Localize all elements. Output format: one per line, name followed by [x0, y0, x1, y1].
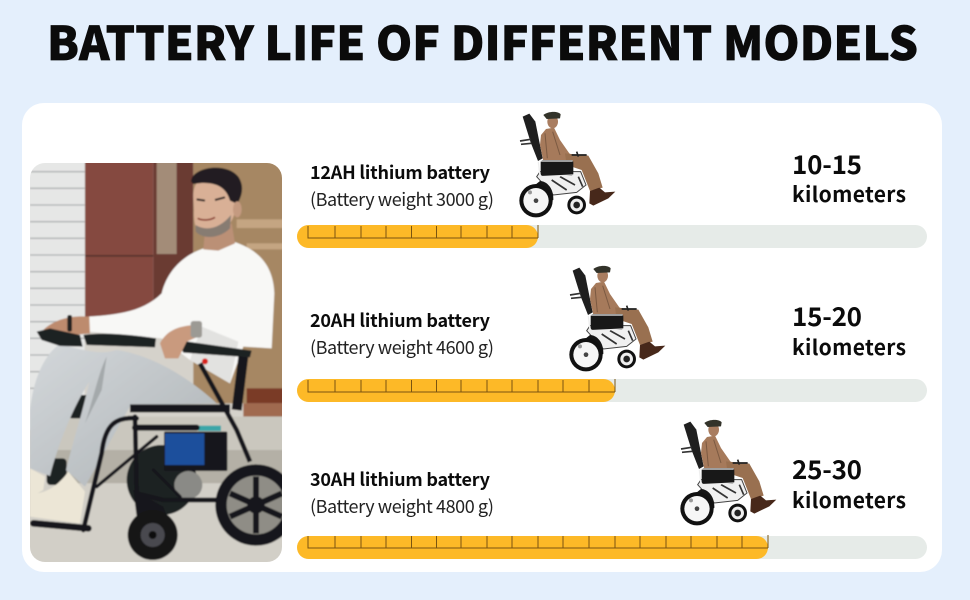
label: 30AH battery name: 30AH lithium battery	[310, 466, 491, 492]
battery pack	[164, 432, 227, 471]
row 3: 30AH	[297, 420, 927, 559]
shoes	[30, 472, 85, 523]
frame	[33, 417, 227, 530]
icon: wheelchair user, row 2	[569, 266, 665, 371]
hand on joystick	[43, 316, 90, 335]
photo: man in electric wheelchair	[30, 163, 282, 562]
progress bar: 20AH	[297, 379, 927, 402]
row 1: 12AH	[297, 112, 927, 248]
large wheel	[214, 464, 282, 546]
hand and watch	[160, 324, 196, 359]
trousers	[30, 345, 217, 487]
unit: kilometers, row 2: kilometers	[792, 332, 906, 362]
icon: wheelchair user, row 1	[519, 112, 615, 217]
sweater	[88, 242, 274, 383]
seat behind legs	[70, 394, 87, 420]
panel: card	[22, 103, 942, 572]
label: 20AH battery name: 20AH lithium battery	[310, 307, 491, 333]
armrests	[37, 328, 83, 347]
rear tire and motor	[127, 445, 197, 515]
title: BATTERY LIFE OF DIFFERENT MODELS	[47, 8, 918, 74]
label: 12AH battery weight: (Battery weight 3000 g)	[310, 186, 494, 212]
caster wheel	[134, 496, 165, 517]
seat cushion	[129, 403, 231, 414]
backrest post	[200, 363, 250, 462]
range: 15-20: 15-20	[792, 297, 862, 334]
neck and head	[203, 223, 235, 251]
label: 12AH battery name: 12AH lithium battery	[310, 159, 491, 185]
range: 25-30: 25-30	[792, 450, 862, 487]
unit: kilometers, row 3: kilometers	[792, 485, 906, 515]
unit: kilometers, row 1: kilometers	[792, 179, 906, 209]
progress bar: 12AH	[297, 225, 927, 248]
row 2: 20AH	[297, 266, 927, 402]
label: 20AH battery weight: (Battery weight 4600 g)	[310, 334, 494, 360]
progress bar: 30AH	[297, 535, 927, 559]
label: 30AH battery weight: (Battery weight 4800 g)	[310, 493, 494, 519]
range: 10-15: 10-15	[792, 145, 862, 182]
icon: wheelchair user, row 3	[680, 420, 776, 525]
